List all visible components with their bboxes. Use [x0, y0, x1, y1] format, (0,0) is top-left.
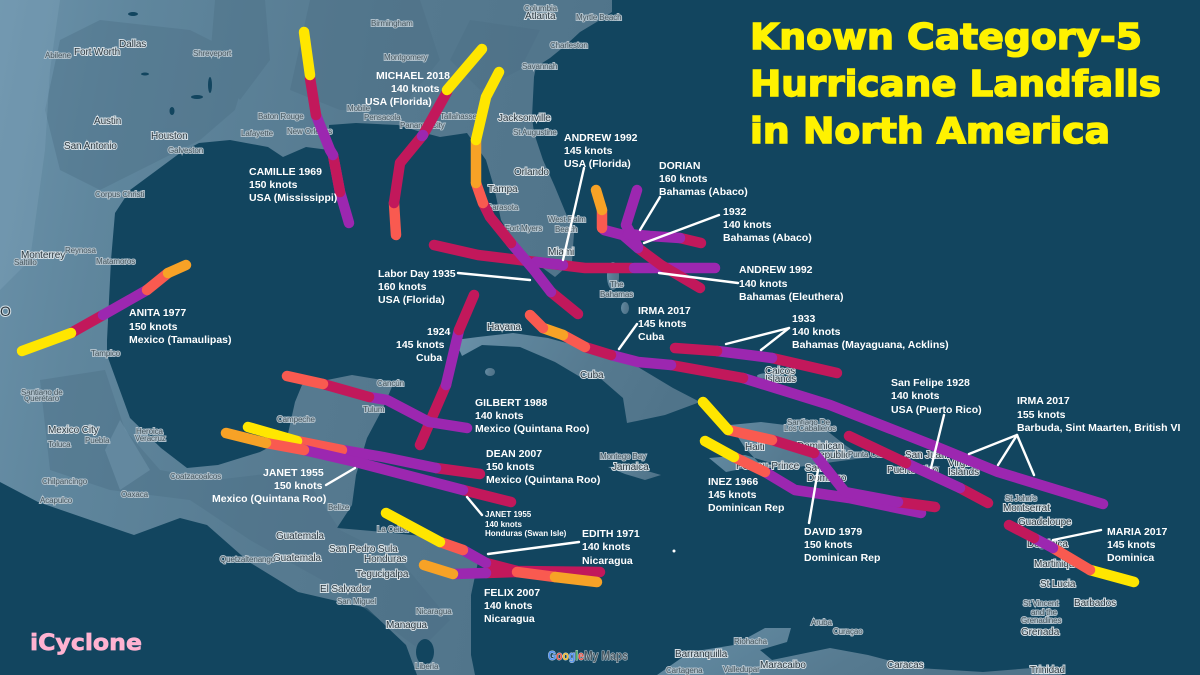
- label: Dean 2007: [486, 448, 600, 486]
- base map: place names: Jamaica: [612, 462, 649, 473]
- base map: place names: Birmingham: [371, 19, 413, 28]
- label: Anita 1977: [129, 307, 232, 346]
- label: Edith 1971: 140 knots: [582, 541, 631, 553]
- base map: place names: St Augustine: [513, 128, 557, 137]
- label: Anita 1977: Mexico (Tamaulipas): [129, 334, 232, 346]
- label: San Felipe 1928: USA (Puerto Rico): [891, 404, 982, 416]
- base map: place names: Jacksonville: [498, 113, 551, 124]
- base map: place names: New Orleans: [287, 127, 332, 136]
- base map: place names: Shreveport: [193, 49, 232, 58]
- base map: place names: St Lucia: [1040, 579, 1076, 590]
- label: 1933: 1933: [792, 313, 816, 325]
- base map: place names: Abilene: [45, 51, 72, 60]
- base map: place names: Quetzaltenango: [220, 555, 276, 564]
- title: Hurricane Landfalls: [750, 64, 1161, 105]
- base map: place names: Querétaro: [24, 394, 60, 403]
- base map: place names: Mobile: [347, 104, 371, 113]
- base map: place names: Houston: [151, 131, 188, 142]
- label: Gilbert 1988: [475, 397, 589, 435]
- base map: place names: Maracaibo: [760, 660, 806, 671]
- title: [750, 17, 1161, 152]
- base map: place names: San Juan: [905, 450, 946, 461]
- base map: place names: Islands: [765, 374, 796, 385]
- label: Dean 2007: DEAN 2007: [486, 448, 542, 460]
- track: 1933: [675, 348, 837, 373]
- track: Michael 2018: [394, 49, 482, 235]
- base map: place names: El Salvador: [320, 584, 371, 595]
- label: 1924: 145 knots: [396, 339, 445, 351]
- base map: place names: Republic: [812, 450, 850, 461]
- base map: place names: Myrtle Beach: [576, 13, 621, 22]
- base map: terrain patches: [40, 0, 540, 650]
- label: Gilbert 1988: 140 knots: [475, 410, 524, 422]
- brand: iCyclone: iCyclone: [30, 631, 142, 656]
- base map: place names: Islands: [948, 467, 979, 478]
- base map: place names: Charleston: [550, 41, 588, 50]
- label: Inez 1966: 145 knots: [708, 489, 757, 501]
- label: Labor Day 1935: [378, 268, 456, 306]
- title: Known Category-5: [750, 17, 1142, 58]
- label: Maria 2017: 145 knots: [1107, 539, 1156, 551]
- label: Janet 1955 Honduras: 140 knots: [485, 520, 522, 529]
- label: Inez 1966: [708, 476, 784, 514]
- base map: place names: Fort Worth: [74, 47, 120, 58]
- label: Labor Day 1935: 160 knots: [378, 281, 427, 293]
- label: Janet 1955 Honduras: Honduras (Swan Isle): [485, 529, 567, 538]
- label: 1932: [723, 206, 812, 244]
- base map: place names: Austin: [94, 116, 121, 127]
- base map: place names: O: [0, 303, 11, 319]
- label: Edith 1971: Nicaragua: [582, 555, 633, 567]
- track: 1932 Bahamas: [596, 190, 700, 288]
- base map: place names: Reynosa: [65, 246, 97, 255]
- base map: place names: Toluca: [48, 440, 71, 449]
- label: Camille 1969: CAMILLE 1969: [249, 166, 322, 178]
- base map: place names: Chilpancingo: [42, 477, 88, 486]
- track: Andrew 1992: [434, 245, 715, 268]
- label: Dorian: Bahamas (Abaco): [659, 186, 748, 198]
- base map: place names: Monterrey: [21, 250, 65, 261]
- label: Michael 2018: MICHAEL 2018: [376, 70, 450, 82]
- base map: place names: Montserrat: [1003, 503, 1050, 514]
- label: Camille 1969: [249, 166, 337, 204]
- label: Dorian: [659, 160, 748, 198]
- label: Michael 2018: USA (Florida): [365, 96, 432, 108]
- label: Andrew 1992 Bahamas: Bahamas (Eleuthera): [739, 291, 843, 303]
- base map: place names: West Palm: [548, 215, 586, 224]
- label: Michael 2018: 140 knots: [391, 83, 440, 95]
- track: Labor Day 1935: [476, 72, 578, 314]
- label: David 1979: Dominican Rep: [804, 552, 880, 564]
- label: Anita 1977: 150 knots: [129, 321, 178, 333]
- base map: place names: Guatemala: [276, 531, 325, 542]
- base map: place names: Columbia: [524, 4, 558, 13]
- base map: place names: Belize: [328, 503, 350, 512]
- track: David 1979: [703, 402, 935, 507]
- base map: place names: Mexico City: [48, 425, 99, 436]
- label: 1924: 1924: [427, 326, 451, 338]
- base map: place names: Santo: [805, 463, 831, 474]
- base map: place names: Havana: [487, 322, 521, 333]
- base map: place names: Managua: [386, 620, 428, 631]
- label: 1924: [396, 326, 451, 364]
- base map: place names: Baton Rouge: [258, 112, 304, 121]
- label: Janet 1955 Honduras: JANET 1955: [485, 510, 532, 519]
- base map: place names: Port-au-Prince: [736, 461, 800, 472]
- label: Dean 2007: 150 knots: [486, 461, 535, 473]
- base map: place names: Montego Bay: [600, 452, 646, 461]
- base map: place names: Caracas: [887, 660, 924, 671]
- track: Janet 1955: [226, 433, 511, 502]
- base map: place names: La Ceiba: [377, 525, 409, 534]
- base map: place names: The: [610, 280, 624, 289]
- label: Andrew 1992 Bahamas: ANDREW 1992: [739, 264, 813, 276]
- base map: place names: Santiago de: [21, 388, 63, 397]
- label: Dorian: 160 knots: [659, 173, 708, 185]
- track: Felix 2007: [424, 565, 597, 582]
- base map: place names: Miami: [548, 247, 574, 258]
- label: Irma 2017 Cuba: 145 knots: [638, 318, 687, 330]
- base map: place names: Cancún: [377, 379, 404, 388]
- base map: place names: Dominican: [797, 441, 843, 452]
- base map: place names: Aruba: [811, 618, 832, 627]
- label: David 1979: 150 knots: [804, 539, 853, 551]
- track: Dorian: [626, 190, 701, 247]
- base map: place names: Heroica: [136, 427, 164, 436]
- label: Felix 2007: 140 knots: [484, 600, 533, 612]
- base map: place names: St Vincent: [1023, 599, 1059, 608]
- base map: place names: Caicos: [765, 366, 795, 377]
- base map: place names: Coatzacoalcos: [170, 472, 221, 481]
- label: Edith 1971: EDITH 1971: [582, 528, 640, 540]
- label: 1932: 140 knots: [723, 219, 772, 231]
- base map: place names: Savannah: [522, 62, 557, 71]
- track: Inez 1966: [705, 441, 921, 513]
- base map: place names: Domingo: [807, 473, 847, 484]
- label: Gilbert 1988: Mexico (Quintana Roo): [475, 423, 589, 435]
- label: Edith 1971: [582, 528, 640, 567]
- label: Andrew 1992 Bahamas: [739, 264, 843, 303]
- label: Janet 1955 Mexico: JANET 1955: [263, 467, 324, 479]
- base map: place names: Campeche: [277, 415, 316, 424]
- base map: place names: San Pedro Sula: [329, 544, 398, 555]
- base map: place names: Los Caballeros: [784, 424, 836, 433]
- label: Irma 2017 Cuba: [638, 305, 691, 343]
- base map: place names: Punta Cana: [848, 450, 890, 459]
- base map: place names: Tulum: [363, 405, 385, 414]
- label: San Felipe 1928: 140 knots: [891, 390, 940, 402]
- label: Irma 2017 Cuba: IRMA 2017: [638, 305, 691, 317]
- base map: place names: Grenada: [1021, 627, 1060, 638]
- label: Labor Day 1935: USA (Florida): [378, 294, 445, 306]
- base map: place names: Tampico: [91, 349, 121, 358]
- label: David 1979: DAVID 1979: [804, 526, 862, 538]
- base map: place names: Tegucigalpa: [356, 569, 409, 580]
- label: David 1979: [804, 526, 880, 564]
- label: Andrew 1992 Florida: ANDREW 1992: [564, 132, 638, 144]
- base map: place names: Riohacha: [734, 637, 768, 646]
- base map: place names: Corpus Christi: [95, 190, 145, 199]
- Google My Maps logo: GoogleMy Maps: [548, 648, 628, 663]
- base map: place names: Montgomery: [384, 53, 428, 62]
- label: Inez 1966: INEZ 1966: [708, 476, 758, 488]
- base map: place names: Galveston: [168, 146, 203, 155]
- label: Irma 2017 Leewards: 155 knots: [1017, 409, 1066, 421]
- label: Janet 1955 Honduras: [485, 510, 567, 538]
- label: San Felipe 1928: San Felipe 1928: [891, 377, 970, 389]
- label: Maria 2017: MARIA 2017: [1107, 526, 1167, 538]
- track: Irma 2017: [530, 315, 1103, 504]
- base map: place names: San Miguel: [337, 597, 376, 606]
- label: Irma 2017 Leewards: [1017, 395, 1180, 434]
- base map: place names: Nicaragua: [416, 607, 452, 616]
- base map: place names: Barbados: [1074, 598, 1116, 609]
- label: Felix 2007: Nicaragua: [484, 613, 535, 625]
- base map: place names: Haiti: [745, 442, 765, 453]
- base map: place names: Santiago De: [787, 418, 831, 427]
- base map: place names: Panama City: [400, 121, 445, 130]
- base map: place names: Curaçao: [833, 627, 863, 636]
- base map: place names: Tallahassee: [440, 112, 482, 121]
- base map: place names: Matamoros: [96, 257, 135, 266]
- label: Gilbert 1988: GILBERT 1988: [475, 397, 548, 409]
- base map: place names: Saltillo: [14, 258, 37, 267]
- base map: place names: Honduras: [364, 554, 407, 565]
- label: Felix 2007: [484, 587, 540, 625]
- base map: place names: Tampa: [488, 184, 518, 195]
- base map: lakes: [128, 12, 434, 665]
- base map: place names: and the: [1031, 608, 1058, 617]
- label: Janet 1955 Mexico: Mexico (Quintana Roo): [212, 493, 326, 505]
- base map: place names: Puerto Rico: [887, 465, 939, 476]
- small white dot: [672, 550, 676, 552]
- base map: place names: Martinique: [1034, 559, 1080, 570]
- label: Anita 1977: ANITA 1977: [129, 307, 186, 319]
- base map: place names: St John's: [1005, 494, 1037, 503]
- track: Edith 1971: [386, 513, 600, 572]
- label: 1932: 1932: [723, 206, 747, 218]
- label: Andrew 1992 Florida: 145 knots: [564, 145, 613, 157]
- track: Anita 1977: [22, 265, 186, 351]
- base map: place names: Atlanta: [525, 11, 556, 22]
- base map: place names: Acapulco: [40, 496, 73, 505]
- base map: place names: Oaxaca: [121, 490, 149, 499]
- label: Maria 2017: Dominica: [1107, 552, 1154, 564]
- label: Camille 1969: USA (Mississippi): [249, 192, 337, 204]
- base map: place names: Barranquilla: [675, 649, 728, 660]
- label: 1932: Bahamas (Abaco): [723, 232, 812, 244]
- label: Irma 2017 Leewards: Barbuda, Sint Maarten, British VI: [1017, 422, 1180, 434]
- track: Camille 1969: [304, 32, 349, 223]
- label: Dorian: DORIAN: [659, 160, 700, 172]
- label: Andrew 1992 Bahamas: 140 knots: [739, 278, 788, 290]
- base map: place names: Lafayette: [241, 129, 274, 138]
- label: Felix 2007: FELIX 2007: [484, 587, 540, 599]
- label: Maria 2017: [1107, 526, 1167, 564]
- base map: place names: Orlando: [514, 167, 549, 178]
- label: Irma 2017 Cuba: Cuba: [638, 331, 664, 343]
- label: Janet 1955 Mexico: [212, 467, 326, 505]
- base map: place names: Dominica: [1027, 539, 1068, 550]
- base map: place names: Guatemala: [273, 553, 322, 564]
- base map: place names: Guadeloupe: [1018, 517, 1072, 528]
- label: San Felipe 1928: [891, 377, 982, 416]
- label: Andrew 1992 Florida: [564, 132, 638, 170]
- base map: place names: Bahamas: [600, 290, 633, 299]
- label: Andrew 1992 Florida: USA (Florida): [564, 158, 631, 170]
- base map: place names: Sarasota: [487, 203, 519, 212]
- base map: place names: Grenadines: [1021, 616, 1061, 625]
- label: Dean 2007: Mexico (Quintana Roo): [486, 474, 600, 486]
- label: Michael 2018: [365, 70, 450, 108]
- track: San Felipe 1928: [849, 436, 988, 503]
- track: Gilbert 1988: [287, 376, 467, 428]
- label: Labor Day 1935: Labor Day 1935: [378, 268, 456, 280]
- label: 1933: [792, 313, 949, 351]
- label: Inez 1966: Dominican Rep: [708, 502, 784, 514]
- base map: place names: Beach: [555, 225, 577, 234]
- base map: place names: Cartagena: [666, 666, 703, 675]
- base map: place names: Puebla: [85, 436, 110, 445]
- base map: place names: Pensacola: [364, 113, 401, 122]
- leader lines: [326, 168, 1101, 554]
- title: in North America: [750, 111, 1110, 152]
- base map: place names: Dallas: [119, 39, 146, 50]
- label: 1924: Cuba: [416, 352, 442, 364]
- track: Maria 2017: [1009, 525, 1134, 582]
- base map: place names: San Antonio: [64, 141, 117, 152]
- label: 1933: 140 knots: [792, 326, 841, 338]
- base map: place names: Veracruz: [135, 434, 166, 443]
- base map: place names: Fort Myers: [505, 224, 542, 233]
- label: Camille 1969: 150 knots: [249, 179, 298, 191]
- base map: place names: Virgin: [948, 458, 973, 469]
- label: Janet 1955 Mexico: 150 knots: [274, 480, 323, 492]
- base map: place names: Cuba: [580, 370, 604, 381]
- track: Dean 2007: [248, 427, 480, 474]
- label: 1933: Bahamas (Mayaguana, Acklins): [792, 339, 949, 351]
- track: 1924: [420, 295, 474, 445]
- label: Irma 2017 Leewards: IRMA 2017: [1017, 395, 1070, 407]
- base map: place names: Valledupar: [723, 665, 760, 674]
- base map: place names: Liberia: [415, 662, 439, 671]
